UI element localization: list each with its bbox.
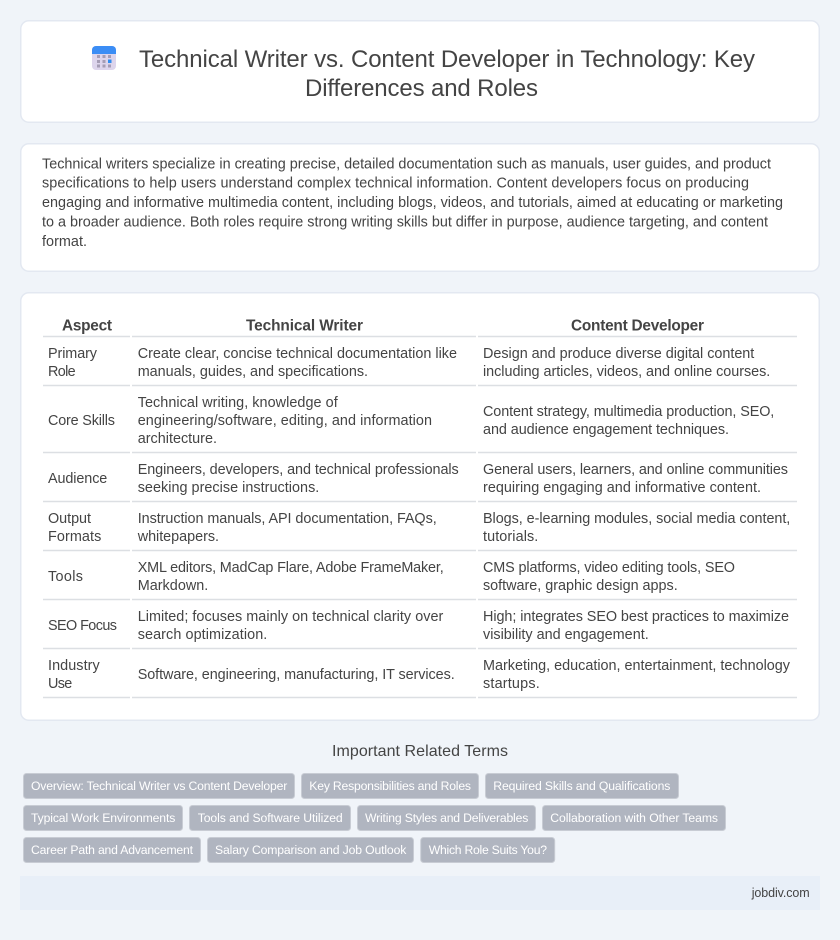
text block: introduction paragraph: specifications to help users understand complex technical information. Content developers focus on producing	[42, 176, 749, 192]
tag: which role: Which Role Suits You?	[429, 843, 547, 857]
table row: audience: Audience	[48, 471, 107, 487]
table row: core skills	[48, 395, 774, 447]
tag: salary comparison	[208, 838, 414, 862]
table row: tools: XML editors, MadCap Flare, Adobe FrameMaker,	[138, 560, 444, 576]
table row: output formats: Output	[48, 511, 91, 527]
table row: output formats: Blogs, e-learning modules, social media content,	[483, 511, 790, 527]
panel: related term tags	[24, 774, 726, 862]
tag: tools and software	[190, 806, 350, 830]
table row: primary role: Design and produce diverse digital content	[483, 346, 754, 362]
footer source text: jobdiv.com	[751, 886, 810, 900]
table row: seo focus: visibility and engagement.	[483, 627, 649, 643]
tag: career path: Career Path and Advancement	[31, 843, 194, 857]
table row: seo focus: High; integrates SEO best practices to maximize	[483, 609, 789, 625]
title: Technical Writer vs. Content Developer in Technology: Key	[139, 46, 755, 73]
table row: core skills: Content strategy, multimedia production, SEO,	[483, 404, 774, 420]
text block: introduction paragraph: engaging and informative multimedia content, including blogs, videos, and tutorials, aimed at educating or marketing	[42, 195, 783, 211]
table row: seo focus: SEO Focus	[48, 618, 117, 634]
table row: audience: General users, learners, and online communities	[483, 462, 788, 478]
table header row	[62, 318, 704, 334]
title: Differences and Roles	[305, 75, 538, 102]
table row: output formats: Formats	[48, 529, 101, 545]
tag: work environments: Typical Work Environments	[31, 811, 175, 825]
table row: primary role: Role	[48, 364, 76, 380]
table row: primary role	[48, 346, 770, 380]
text block: introduction paragraph	[42, 156, 783, 250]
table row: industry use	[48, 658, 791, 692]
table row: core skills: architecture.	[138, 431, 217, 447]
table row: tools: software, graphic design apps.	[483, 578, 678, 594]
icon: calendar	[92, 46, 116, 70]
table row: primary role: manuals, guides, and specifications.	[138, 364, 368, 380]
table row: core skills: engineering/software, editing, and information	[138, 413, 432, 429]
table row: industry use: Software, engineering, manufacturing, IT services.	[138, 667, 455, 683]
tag: tools and software: Tools and Software Utilized	[198, 811, 343, 825]
tag: overview: Overview: Technical Writer vs Content Developer	[31, 779, 287, 793]
table header row: Aspect	[62, 318, 112, 334]
tag: writing styles: Writing Styles and Deliverables	[365, 811, 528, 825]
table row: output formats: whitepapers.	[137, 529, 219, 545]
table row: audience: requiring engaging and informative content.	[483, 480, 761, 496]
text block: introduction paragraph: Technical writers specialize in creating precise, detailed documentation such as manuals, user guides, and product	[42, 156, 771, 172]
tag: collaboration: Collaboration with Other Teams	[550, 811, 718, 825]
table row: seo focus: search optimization.	[138, 627, 267, 643]
tag: which role	[421, 838, 555, 862]
tag: career path	[24, 838, 200, 862]
panel: introduction	[21, 144, 819, 271]
title	[139, 46, 755, 102]
tag: work environments	[24, 806, 182, 830]
table row: industry use: Marketing, education, entertainment, technology	[483, 658, 791, 674]
table row: core skills: Technical writing, knowledge of	[138, 395, 339, 411]
table row: tools: CMS platforms, video editing tools, SEO	[483, 560, 735, 576]
table row: industry use: startups.	[483, 676, 540, 692]
table row: core skills: and audience engagement techniques.	[483, 422, 729, 438]
text block: introduction paragraph: format.	[42, 234, 87, 250]
panel: title header	[21, 21, 819, 122]
table row: tools	[48, 560, 735, 594]
tag: overview	[24, 774, 294, 798]
table row: audience	[48, 462, 788, 496]
tag: required skills: Required Skills and Qualifications	[493, 779, 670, 793]
table row: primary role: Create clear, concise technical documentation like	[138, 346, 457, 362]
table row: primary role: including articles, videos, and online courses.	[483, 364, 770, 380]
tag: key responsibilities: Key Responsibilities and Roles	[309, 779, 471, 793]
panel: comparison table	[21, 293, 819, 720]
table row: seo focus	[48, 609, 789, 643]
table row: seo focus: Limited; focuses mainly on technical clarity over	[138, 609, 444, 625]
heading: important related terms: Important Related Terms	[332, 743, 508, 760]
tag: writing styles	[358, 806, 536, 830]
text block: introduction paragraph: to a broader audience. Both roles require strong writing skills but differ in purpose, audience targeting, and content	[42, 215, 768, 231]
table row: core skills: Core Skills	[48, 413, 115, 429]
table row: industry use: Industry	[48, 658, 100, 674]
table row: tools: Tools	[48, 569, 83, 585]
table row: audience: Engineers, developers, and technical professionals	[138, 462, 459, 478]
table header row: Technical Writer	[246, 318, 363, 334]
table row: audience: seeking precise instructions.	[138, 480, 319, 496]
table header row: Content Developer	[571, 318, 704, 334]
table row: tools: Markdown.	[138, 578, 208, 594]
table row: output formats: Instruction manuals, API documentation, FAQs,	[138, 511, 437, 527]
footer bar	[20, 876, 820, 910]
tag: salary comparison: Salary Comparison and Job Outlook	[215, 843, 407, 857]
tag: required skills	[486, 774, 678, 798]
tag: collaboration	[542, 806, 726, 830]
table row: industry use: Use	[48, 676, 72, 692]
table row: output formats: tutorials.	[483, 529, 538, 545]
table row: primary role: Primary	[48, 346, 98, 362]
table row: output formats	[48, 511, 790, 545]
tag: key responsibilities	[302, 774, 478, 798]
